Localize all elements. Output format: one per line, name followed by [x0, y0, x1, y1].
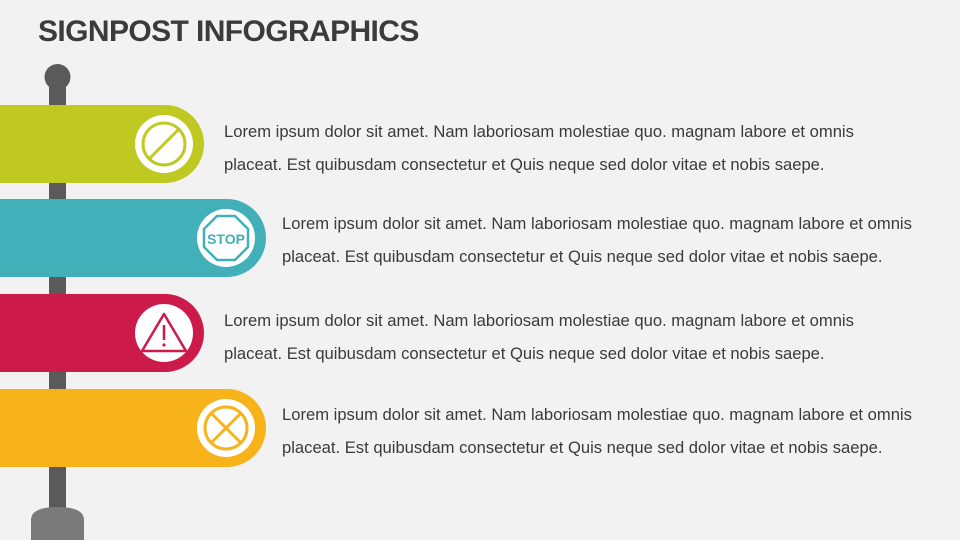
sign 1 [0, 105, 204, 183]
text 3: placeat. Est quibusdam consectetur et Quis neque sed dolor vitae et nobis saepe. [224, 344, 825, 363]
text 1: Lorem ipsum dolor sit amet. Nam laboriosam molestiae quo. magnam labore et omnis [224, 122, 854, 141]
sign 3 [0, 294, 204, 372]
text 1 [224, 122, 854, 174]
text 3: Lorem ipsum dolor sit amet. Nam laboriosam molestiae quo. magnam labore et omnis [224, 311, 854, 330]
sign 2: STOP [207, 231, 245, 247]
text 4: Lorem ipsum dolor sit amet. Nam laboriosam molestiae quo. magnam labore et omnis [282, 405, 912, 424]
text 4 [282, 405, 912, 457]
pole base [31, 507, 84, 540]
pole [44, 64, 70, 516]
sign 4 [0, 389, 266, 467]
text 4: placeat. Est quibusdam consectetur et Quis neque sed dolor vitae et nobis saepe. [282, 438, 883, 457]
text 2: placeat. Est quibusdam consectetur et Quis neque sed dolor vitae et nobis saepe. [282, 247, 883, 266]
text 1: placeat. Est quibusdam consectetur et Quis neque sed dolor vitae et nobis saepe. [224, 155, 825, 174]
sign 2 [0, 199, 266, 277]
text 2: Lorem ipsum dolor sit amet. Nam laboriosam molestiae quo. magnam labore et omnis [282, 214, 912, 233]
text 2 [282, 214, 912, 266]
text 3 [224, 311, 854, 363]
title: SIGNPOST INFOGRAPHICS [38, 15, 419, 48]
